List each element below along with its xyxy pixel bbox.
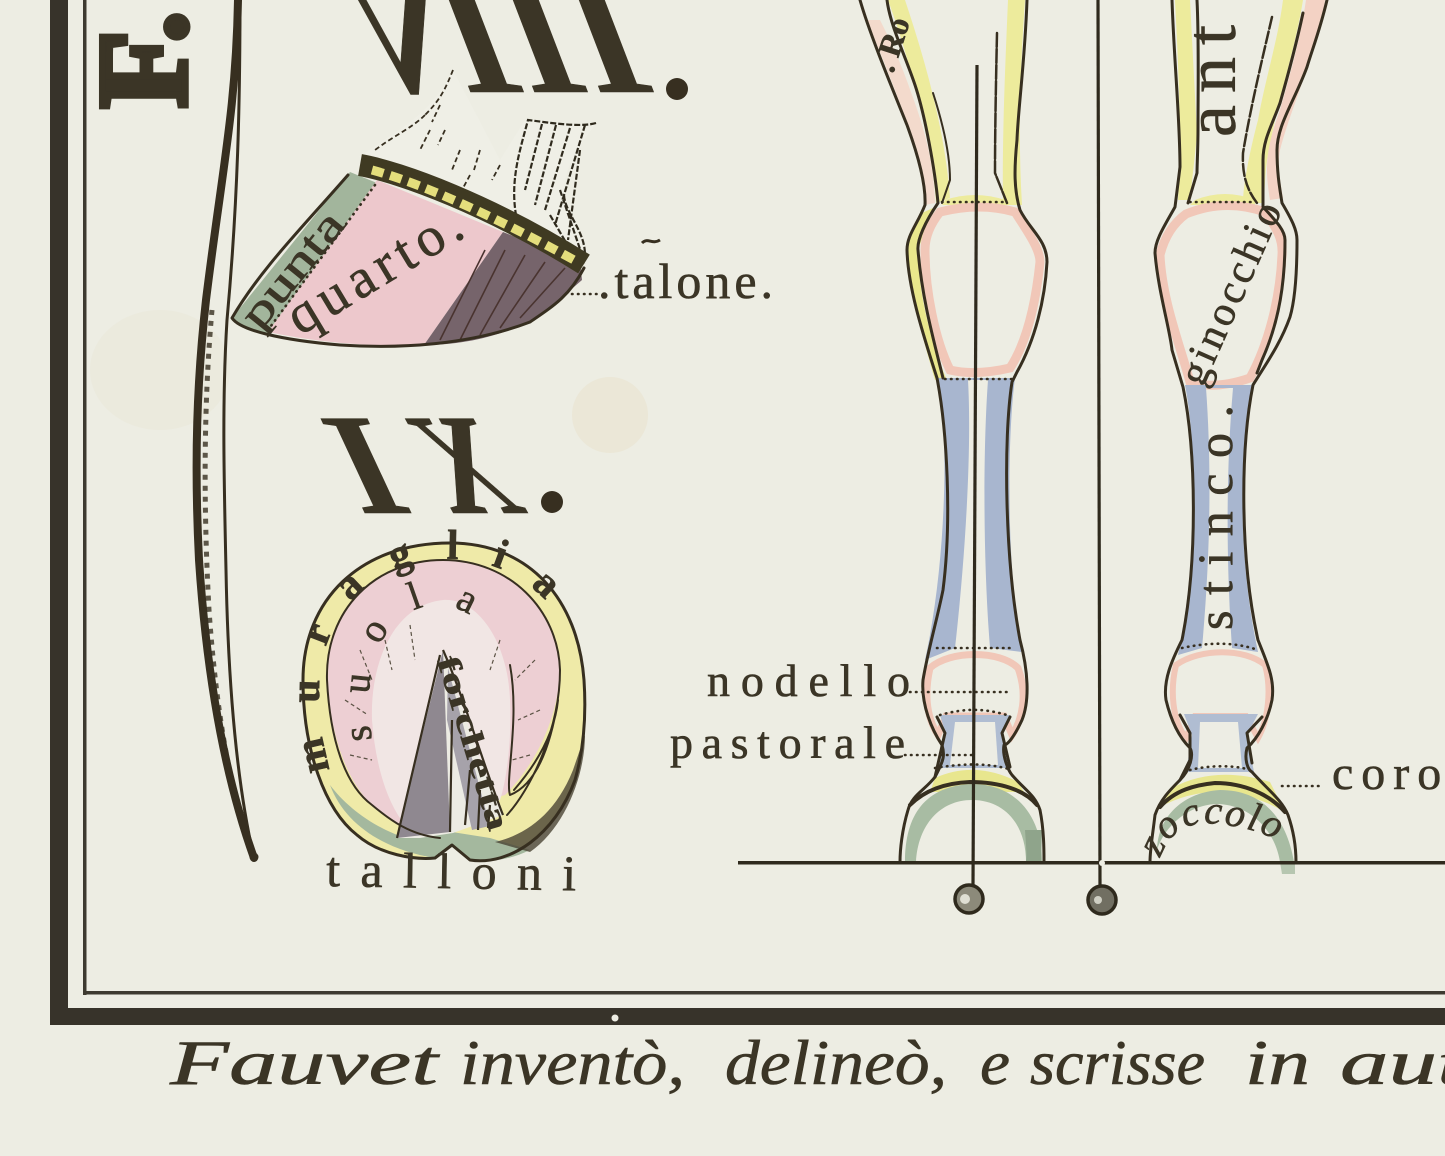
icon: hoof underside view: [299, 529, 586, 862]
label: quarto: quarto.: [275, 194, 474, 347]
leg diagram: side view: [1086, 0, 1328, 916]
heading: roman numeral IX: X: [381, 386, 548, 545]
label: talone: .talone.: [598, 253, 773, 309]
label: talloni: talloni: [326, 841, 577, 901]
engraver caption: delineò,: [725, 1027, 947, 1098]
engraver caption: Fauvet: [168, 1027, 441, 1098]
label: suola: suola: [350, 581, 474, 740]
engraver caption: inventò,: [460, 1027, 685, 1098]
icon: long curved horseshoe profile: [197, 0, 258, 862]
label: forchetta: forchetta: [430, 652, 517, 834]
label: ginocchio: ginocchio: [1170, 195, 1291, 392]
label: front view top text: . Ro: [865, 13, 917, 76]
heading: roman numeral IX: [300, 385, 563, 545]
label: stinco: stinco.: [1187, 405, 1243, 630]
label: muraglia: muraglia: [299, 529, 556, 774]
heading: roman numeral VIII: [333, 0, 688, 129]
label: pastorale: pastorale: [670, 717, 905, 768]
engraver caption: [168, 1027, 1445, 1098]
engraver caption: in: [1245, 1027, 1310, 1098]
engraver caption: scrisse: [1030, 1027, 1205, 1098]
leg diagram: front view: [860, 0, 1047, 913]
icon: hoof side view: [230, 70, 596, 347]
engraver caption: e: [980, 1027, 1010, 1098]
label: punta: punta: [230, 200, 355, 338]
heading: roman numeral IX: I: [300, 385, 431, 544]
side label fragment: F.: [74, 11, 213, 108]
label: nodello: nodello: [707, 655, 910, 706]
label: zoccolo: zoccolo: [1144, 802, 1282, 858]
label: antibraccio: ant: [1171, 13, 1251, 137]
ground line: [738, 860, 1445, 866]
